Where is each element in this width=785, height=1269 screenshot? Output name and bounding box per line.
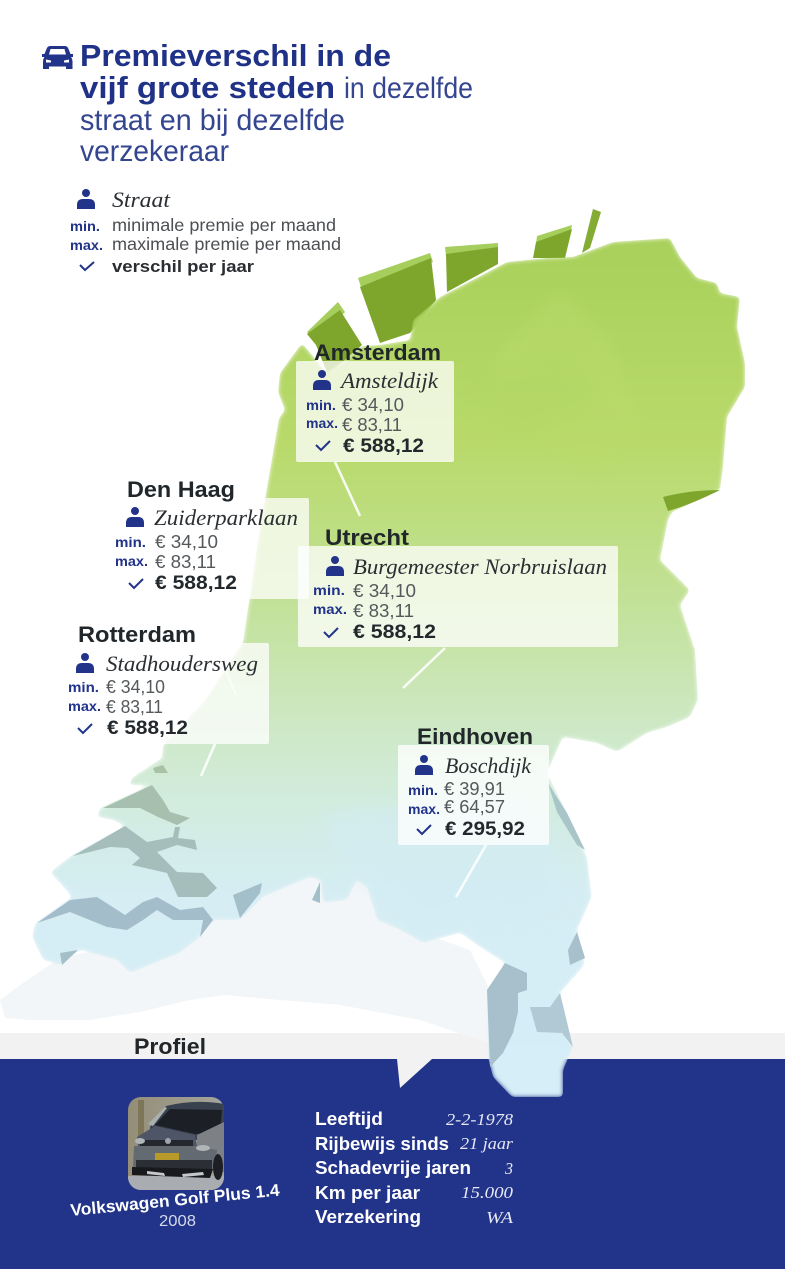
speech tail xyxy=(397,1059,432,1088)
title: verzekeraar xyxy=(80,135,229,168)
panel: Rotterdam: min. xyxy=(68,680,99,695)
legend: Straat xyxy=(112,187,171,212)
profile list: Km per jaar xyxy=(315,1183,420,1203)
icon: check xyxy=(129,579,143,588)
panel: Utrecht xyxy=(298,525,618,647)
panel: Eindhoven: € 295,92 xyxy=(445,819,525,840)
Limburg inner border xyxy=(530,993,573,1047)
icon: check xyxy=(78,724,92,733)
panel: Den Haag: min. xyxy=(115,535,146,550)
panel: Den Haag: Den Haag xyxy=(127,477,235,502)
legend: min. xyxy=(70,219,100,234)
Wadden island Rottum xyxy=(582,209,601,253)
profile list: Schadevrije jaren xyxy=(315,1158,471,1178)
profile list xyxy=(315,1109,514,1227)
Wadden island Schiermonnikoog xyxy=(533,225,572,258)
panel: Utrecht: min. xyxy=(313,583,345,598)
icon: check xyxy=(417,825,431,834)
profile list: 15.000 xyxy=(461,1183,514,1202)
icon: person xyxy=(326,556,344,576)
panel: Eindhoven xyxy=(398,724,549,845)
title: Premieverschil in de xyxy=(80,39,391,73)
heading: Profiel: Profiel xyxy=(134,1034,206,1059)
panel: Utrecht: Utrecht xyxy=(325,525,410,550)
title: in dezelfde xyxy=(344,72,473,105)
title: straat en bij dezelfde xyxy=(80,104,345,137)
panel: Amsterdam: Amsterdam xyxy=(314,340,441,365)
pointer Amsterdam xyxy=(335,462,360,516)
legend: maximale premie per maand xyxy=(112,234,341,254)
panel: Utrecht: € 83,11 xyxy=(353,600,414,621)
Wadden island Terschelling xyxy=(358,253,436,343)
title: vijf grote steden xyxy=(80,71,335,105)
panel: Eindhoven: max. xyxy=(408,802,440,817)
province shading north xyxy=(470,290,640,470)
inlet east xyxy=(663,490,720,511)
panel: Amsterdam: max. xyxy=(306,416,338,431)
mainland xyxy=(32,238,745,1097)
panel: Eindhoven: Eindhoven xyxy=(417,724,533,749)
map of the Netherlands xyxy=(32,209,745,1097)
panel: Den Haag: Zuiderparklaan xyxy=(154,505,298,530)
Limburg east border xyxy=(568,932,585,965)
profile grey band xyxy=(0,1033,785,1060)
panel: Rotterdam: € 588,12 xyxy=(107,718,188,739)
icon: person xyxy=(76,653,94,673)
car photo xyxy=(128,1097,224,1190)
legend: minimale premie per maand xyxy=(112,215,336,235)
water small centre xyxy=(312,882,320,903)
icon: person xyxy=(313,370,331,390)
legend: verschil per jaar xyxy=(112,257,254,276)
water Oosterschelde xyxy=(73,826,217,897)
panel: Utrecht: max. xyxy=(313,602,347,617)
panel: Rotterdam: Rotterdam xyxy=(78,622,196,647)
title xyxy=(80,39,473,168)
panel: Amsterdam: € 588,12 xyxy=(343,436,424,457)
pointer Rotterdam xyxy=(201,744,215,776)
legend xyxy=(70,187,341,276)
Limburg west border xyxy=(487,963,527,1067)
water Haringvliet xyxy=(103,785,190,825)
panel: Den Haag: € 34,10 xyxy=(155,531,218,552)
Wadden island Ameland xyxy=(445,243,498,292)
icon: check legend xyxy=(80,262,94,270)
water small north xyxy=(153,765,168,773)
legend: max. xyxy=(70,238,103,253)
profile list: Rijbewijs sinds xyxy=(315,1134,449,1154)
panel: Utrecht: € 34,10 xyxy=(353,580,416,601)
panel: Amsterdam: min. xyxy=(306,398,336,413)
panel: Amsterdam xyxy=(296,340,454,462)
panel: Den Haag: € 83,11 xyxy=(155,551,216,572)
profile list: 3 xyxy=(504,1159,513,1178)
profile list: Leeftijd xyxy=(315,1109,383,1129)
panel: Eindhoven: € 64,57 xyxy=(444,796,505,817)
panel: Rotterdam: Stadhoudersweg xyxy=(106,651,258,676)
panel: Den Haag: € 588,12 xyxy=(155,573,237,594)
panel: Amsterdam: € 83,11 xyxy=(342,414,402,435)
panel: Amsterdam: Amsteldijk xyxy=(339,368,439,393)
panel: Amsterdam: € 34,10 xyxy=(342,394,404,415)
profile list: Verzekering xyxy=(315,1207,421,1227)
neighbouring land shape xyxy=(0,872,495,1045)
province shading south xyxy=(320,800,570,930)
profile list: 2-2-1978 xyxy=(446,1110,514,1129)
water Westerschelde xyxy=(37,897,213,937)
panel: Eindhoven: Boschdijk xyxy=(445,753,532,778)
province shading centre xyxy=(470,355,600,440)
pointer Eindhoven xyxy=(456,845,486,897)
pointer Den Haag xyxy=(196,599,236,695)
car year: 2008 xyxy=(159,1213,196,1230)
panel: Rotterdam: € 83,11 xyxy=(106,696,163,717)
profile navy panel xyxy=(0,1059,785,1269)
icon: check xyxy=(316,441,330,450)
panel: Rotterdam xyxy=(54,622,269,744)
icon: check xyxy=(324,628,338,637)
panel: Rotterdam: € 34,10 xyxy=(106,676,165,697)
panel: Rotterdam: max. xyxy=(68,699,101,714)
panel: Utrecht: Burgemeester Norbruislaan xyxy=(353,554,607,579)
icon: person xyxy=(415,755,433,775)
profile list: WA xyxy=(486,1208,514,1227)
panel: Den Haag xyxy=(101,477,309,599)
car name: Volkswagen Golf Plus 1.4 xyxy=(70,1181,281,1220)
profile list: 21 jaar xyxy=(460,1134,513,1153)
panel: Den Haag: max. xyxy=(115,554,148,569)
Wadden island Texel xyxy=(307,302,362,375)
icon: person xyxy=(126,507,144,527)
water small south xyxy=(60,950,78,965)
icon: person legend xyxy=(77,189,95,209)
eastern edge shade xyxy=(548,783,585,850)
water inland delta xyxy=(233,883,262,918)
panel: Eindhoven: € 39,91 xyxy=(444,778,505,799)
panel: Utrecht: € 588,12 xyxy=(353,622,436,643)
icon: car xyxy=(42,46,73,69)
pointer Utrecht xyxy=(403,648,445,688)
panel: Eindhoven: min. xyxy=(408,783,438,798)
